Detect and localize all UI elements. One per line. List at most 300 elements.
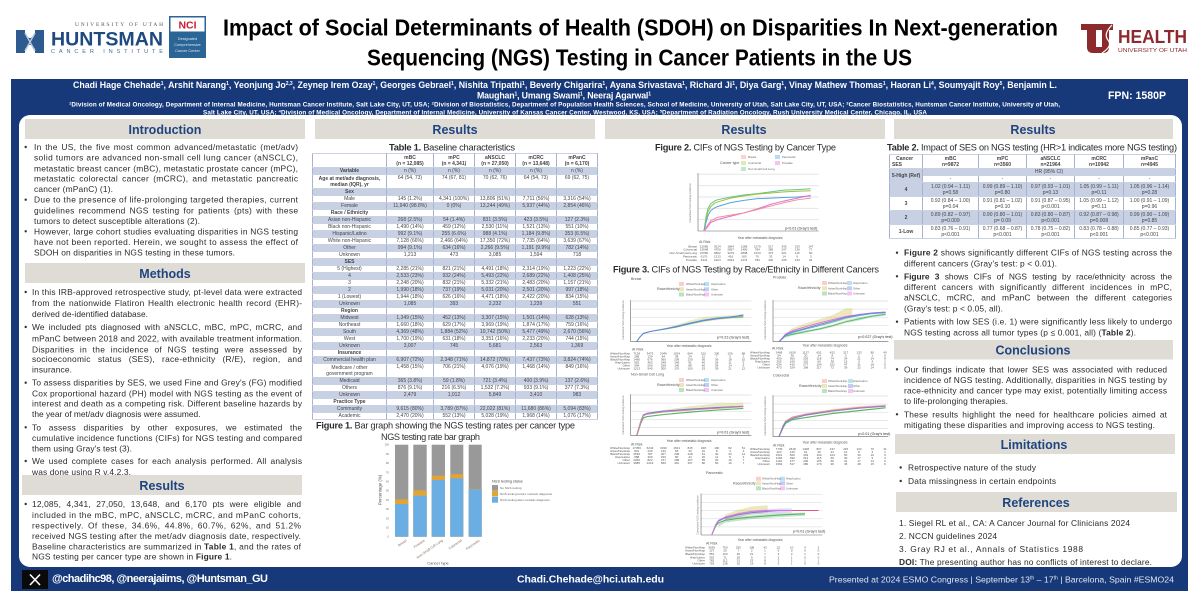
table 2: impact of SES on NGS testing: p=0.11: [1091, 190, 1107, 196]
chart: figure 2 CIF by cancer type: 77: [809, 248, 813, 252]
chart: figure 3 breast: 88: [742, 352, 745, 356]
chart: figure 3 breast: Breast: [631, 277, 641, 281]
table 1: baseline characteristics: 1,184 (9.8%): [522, 231, 550, 237]
chart: figure 3 non-small cell lung: Other: [622, 458, 630, 462]
panel: introduction: tumors to detect susceptible alterations (2).: [34, 216, 200, 226]
table 2: impact of SES on NGS testing: p<0.001: [1140, 232, 1159, 238]
table 1: baseline characteristics: 1,944 (18%): [396, 294, 424, 300]
chart: figure 2 CIF by cancer type: 147: [808, 244, 814, 248]
chart: figure 3 pancreatic: 26: [723, 549, 727, 553]
chart: figure 3 breast: 64: [662, 355, 665, 359]
chart: figure 3 prostate: 9: [858, 359, 860, 363]
table 2: impact of SES on NGS testing: mPC: [997, 156, 1008, 162]
chart: figure 2 CIF by cancer type: 1279: [754, 244, 761, 248]
panel: limitations: Retrospective nature of the study: [908, 462, 1037, 472]
table 1: baseline characteristics: 5,493 (22%): [481, 273, 509, 279]
table 1: baseline characteristics: 2,483 (20%): [522, 280, 550, 286]
chart: figure 3 non-small cell lung: Asian/NonHisp: [610, 449, 630, 453]
chart: figure 3 prostate: 118: [817, 356, 822, 360]
table 1: baseline characteristics: (n = 4,341): [442, 160, 466, 166]
heading: results column 3: Results: [721, 123, 767, 137]
table 1: baseline characteristics: 1,501 (14%): [522, 315, 550, 321]
table 1: baseline characteristics: 1,191 (9.9%): [522, 245, 550, 251]
chart: figure 3 pancreatic: 138: [722, 561, 728, 565]
table 2: impact of SES on NGS testing: n=4945: [1141, 162, 1158, 168]
chart: figure 3 colorectal: Cumulative NGS testing incidence: [763, 396, 767, 436]
table 2: impact of SES on NGS testing: 0.99 (0.89 – 1.10): [983, 184, 1022, 190]
panel: results summary: 12,085, 4,341, 27,050, 13,648, and 6,170 pts were eligible and: [32, 499, 301, 509]
table 1: baseline characteristics: 216 (6.5%): [442, 385, 466, 391]
table 1: baseline characteristics: 11,940 (98.8%): [393, 203, 427, 209]
table 1: baseline characteristics: 4,341 (100%): [439, 196, 469, 202]
table 1: baseline characteristics: 551: [573, 301, 581, 307]
chart: figure 3 prostate: 3: [845, 354, 847, 358]
table 1: baseline characteristics: 64 (54, 73): [524, 175, 548, 181]
chart: figure 3 breast: 170: [674, 367, 680, 371]
chart: figure 3 breast: 7: [716, 355, 718, 359]
chart: figure 3 prostate: 0: [884, 354, 886, 358]
text block: key results: (Gray's test: p < 0.05, all).: [904, 303, 1003, 313]
chart: figure 3 pancreatic: 3: [778, 552, 780, 556]
chart: figure 2 CIF by cancer type: 2857: [727, 248, 734, 252]
logo: NCI designated comprehensive cancer center: NCI: [178, 20, 197, 32]
table 2: impact of SES on NGS testing: mBC: [945, 156, 956, 162]
chart: figure 3 non-small cell lung: p=0.01 (Gray's test): [717, 430, 749, 434]
table 1: baseline characteristics: 4,369 (48%): [396, 329, 424, 335]
table 2: impact of SES on NGS testing: 0.97 (0.93 – 1.01): [1031, 184, 1070, 190]
chart: figure 3 breast: Race/ethnicity: [657, 287, 680, 291]
chart: figure 3 colorectal: 61: [804, 450, 808, 454]
chart: figure 2 CIF by cancer type: 345: [781, 244, 787, 248]
table 2: impact of SES on NGS testing: p<0.001: [1090, 232, 1108, 238]
chart: NGS testing rate bar graph: Breast: [397, 539, 408, 547]
table 1: baseline characteristics: 1,369: [571, 343, 583, 349]
table 1: baseline characteristics: 255 (6.6%): [442, 231, 466, 237]
panel: methods: interest and death as a competing risk. Different baseline hazards by: [32, 399, 303, 409]
chart: figure 3 pancreatic: 0: [778, 549, 780, 553]
chart: figure 3 pancreatic: Race/ethnicity: [733, 481, 756, 485]
chart: figure 3 prostate: 14: [871, 366, 874, 370]
chart: NGS testing rate bar graph: No NGS testing: [500, 486, 522, 490]
table 1: baseline characteristics: 551 (10%): [565, 224, 589, 230]
heading: results column 3: [605, 119, 885, 139]
panel: references: 1. Siegel RL et al., CA: A Cancer Journal for Clinicians 2024: [899, 518, 1130, 528]
chart: figure 3 pancreatic: 1: [804, 558, 806, 562]
chart: figure 3 non-small cell lung: Unknown: [617, 461, 630, 465]
table 1: baseline characteristics: 1,468 (14%): [522, 364, 550, 370]
chart: figure 3 non-small cell lung: 40: [715, 452, 719, 456]
table 1: baseline characteristics: 3,007: [404, 343, 416, 349]
chart: figure 2 CIF by cancer type: Breast: [748, 155, 757, 159]
chart: figure 2 CIF by cancer type: 14: [782, 255, 786, 259]
table 1: baseline characteristics: 3: [348, 280, 351, 286]
chart: figure 3 non-small cell lung: 988: [634, 455, 640, 459]
chart: figure 2 CIF by cancer type: 115: [795, 251, 800, 255]
chart: figure 2 CIF by cancer type: 130: [795, 258, 800, 262]
panel: references: 2. NCCN guidelines 2024: [899, 531, 997, 541]
chart: figure 3 non-small cell lung: 51: [742, 446, 745, 450]
table 2: impact of SES on NGS testing: 0.83 (0.80 – 0.87): [1031, 212, 1070, 218]
table 1: baseline characteristics: 10,742 (50%): [480, 329, 510, 335]
chart: figure 3 breast: 46: [702, 360, 705, 364]
table 2: impact of SES on NGS testing: 1-Low: [899, 228, 913, 234]
chart: figure 3 non-small cell lung: 80: [675, 455, 679, 459]
panel: methods: To assess disparities by SES, we used Fine and Grey's (FG) modified: [32, 378, 302, 388]
chart: figure 3 prostate: 21: [857, 356, 861, 360]
table 2: impact of SES on NGS testing: n=10942: [1089, 162, 1109, 168]
chart: figure 3 prostate: White/NonHisp: [828, 281, 848, 285]
chart: figure 3 pancreatic: 0: [804, 561, 806, 565]
chart: figure 3 non-small cell lung: 238: [674, 452, 680, 456]
table 2: impact of SES on NGS testing: p<0.001: [941, 232, 960, 238]
footer: presentation info: Presented at 2024 ESMO Congress | September 13th – 17th | Barcelona, Spain #ESMO24: [829, 574, 1174, 584]
chart: figure 3 breast: 24: [688, 355, 692, 359]
table 2: impact of SES on NGS testing: -: [1098, 176, 1100, 182]
table 1: baseline characteristics: 992 (9.1%): [398, 231, 422, 237]
chart: figure 2 CIF by cancer type: Colorectal: [683, 248, 697, 252]
panel: methods: To assess disparities by other exposures, we estimated the: [32, 422, 302, 432]
table 1: baseline characteristics: Variable: [340, 168, 359, 174]
chart: figure 3 prostate: 8: [831, 354, 833, 358]
table 1: baseline characteristics: 634 (16%): [442, 245, 466, 251]
table 1: baseline characteristics: 628 (13%): [565, 315, 589, 321]
logo: NCI designated comprehensive cancer center: [169, 16, 206, 58]
chart: figure 3 colorectal: 2618: [789, 447, 796, 451]
chart: figure 3 colorectal: 8: [858, 450, 860, 454]
author and affiliation banner: [69, 80, 1060, 116]
table 1: baseline characteristics: 365 (3.8%): [398, 378, 422, 384]
chart: figure 3 colorectal: 66: [831, 456, 834, 460]
chart: figure 3 pancreatic: 0: [804, 549, 806, 553]
chart: figure 3 pancreatic: 2: [818, 546, 820, 550]
chart: figure 3 pancreatic: 1: [791, 555, 793, 559]
chart: figure 3 prostate: At Risk: [772, 346, 784, 350]
chart: figure 3 colorectal: 60: [831, 459, 834, 463]
table 2: impact of SES on NGS testing: p=0.04: [943, 204, 958, 210]
chart: figure 3 non-small cell lung: 19: [728, 461, 732, 465]
table 1: baseline characteristics: 932 (24%): [442, 273, 466, 279]
chart: figure 3 prostate: 101: [803, 359, 809, 363]
chart: figure 3 prostate: 1626: [789, 351, 796, 355]
chart: figure 2 CIF by cancer type: 2808: [741, 251, 748, 255]
table 2: impact of SES on NGS testing: p= 0.09: [994, 218, 1011, 224]
table 1: baseline characteristics: Region: [341, 308, 358, 314]
table 1: baseline characteristics: 849 (16%): [565, 364, 589, 370]
panel: limitations: [895, 434, 1175, 486]
chart: figure 3 non-small cell lung: Black/NonHisp: [686, 388, 705, 392]
chart: figure 3 prostate: Unknown: [757, 366, 770, 370]
table 1: baseline characteristics: Black non-Hispanic: [328, 224, 371, 230]
chart: figure 3 pancreatic: 3639: [708, 546, 715, 550]
panel: results summary: NGS testing per cancer type are shown in Figure 1.: [32, 552, 232, 562]
chart: figure 3 non-small cell lung: 1219: [647, 461, 654, 465]
chart: figure 3 colorectal: 115: [817, 456, 822, 460]
panel: conclusions: Conclusions: [995, 344, 1071, 358]
chart: figure 2 CIF by cancer type: Prostate: [686, 258, 697, 262]
chart: figure 3 pancreatic: 1: [764, 549, 766, 553]
chart: figure 3 colorectal: 517: [790, 462, 795, 466]
table 1: baseline characteristics: 17,350 (72%): [480, 238, 510, 244]
chart: figure 3 pancreatic: 71: [723, 555, 727, 559]
heading: results column 2: [315, 119, 595, 139]
panel: conclusions: mitigating these disparities and improving access to NGS testing.: [904, 420, 1155, 430]
chart: figure 3 pancreatic: 3: [778, 558, 780, 562]
table 2: impact of SES on NGS testing: 0.78 (0.75 – 0.82): [1031, 226, 1070, 232]
chart: figure 2 CIF by cancer type: 784: [755, 248, 760, 252]
table 1: baseline characteristics: 997 (18%): [565, 287, 589, 293]
table 1: baseline characteristics: 4,471 (18%): [481, 294, 509, 300]
figure 3 caption: Figure 3. CIFs of NGS Testing by Race/Ethnicity in Different Cancers: [613, 264, 879, 274]
chart: figure 3 non-small cell lung: 44: [688, 455, 692, 459]
chart: figure 3 colorectal: 160: [816, 453, 822, 457]
chart: figure 3 prostate: Asian/NonHisp: [828, 286, 848, 290]
table 1: baseline characteristics: 393: [450, 301, 458, 307]
chart: figure 3 colorectal: 3: [871, 450, 873, 454]
table 1: baseline characteristics: 2,470 (20%): [396, 413, 424, 419]
logo: University of Utah Health: [1081, 24, 1187, 54]
table 1: baseline characteristics: 145 (1.2%): [398, 196, 422, 202]
chart: figure 3 non-small cell lung: 107: [687, 458, 693, 462]
chart: figure 3 prostate: 39: [844, 366, 848, 370]
chart: figure 3 pancreatic: Asian/NonHisp: [685, 549, 705, 553]
chart: figure 3 breast: Black/NonHisp: [686, 292, 705, 296]
chart: figure 3 non-small cell lung: Hisp/Latino: [615, 455, 630, 459]
table 1: baseline characteristics: 5,937 (44%): [522, 203, 550, 209]
table 1: baseline characteristics: 59 (1.8%): [443, 378, 465, 384]
text block: key results: NGS testing across all tumor types (p ≤ 0.001, all) (Table 2).: [904, 327, 1136, 337]
panel: methods: Methods: [139, 267, 191, 281]
table 2: impact of SES on NGS testing: mPanC: [1141, 156, 1158, 162]
chart: figure 3 non-small cell lung: 7: [743, 461, 745, 465]
chart: figure 3 non-small cell lung: 66: [675, 449, 679, 453]
chart: figure 3 pancreatic: 782: [709, 558, 715, 562]
chart: NGS testing rate bar graph: Prostate: [413, 538, 426, 549]
table 1: baseline characteristics: Sex: [345, 189, 354, 195]
table 1: baseline characteristics: 2,233 (20%): [522, 336, 550, 342]
chart: figure 3 breast: 38: [675, 355, 679, 359]
table 1: baseline characteristics: 1,085: [404, 301, 416, 307]
table 1: baseline characteristics: Asian non-Hispanic: [328, 217, 371, 223]
chart: figure 3 pancreatic: 0: [818, 549, 820, 553]
panel: results summary: received NGS testing after the met/adv diagnosis date, respectively.: [32, 531, 301, 541]
chart: figure 3 prostate: 22: [857, 366, 861, 370]
table 2: impact of SES on NGS testing: n=3560: [994, 162, 1011, 168]
table 2: impact of SES on NGS testing: 0.90 (0.80 – 1.01): [983, 212, 1022, 218]
table 1: baseline characteristics: 2,501 (20%): [522, 287, 550, 293]
table 1: baseline characteristics: 22,022 (81%): [480, 406, 510, 412]
chart: figure 3 breast: 2: [743, 355, 745, 359]
table 1: baseline characteristics: 5,477 (49%): [522, 329, 550, 335]
chart: figure 2 CIF by cancer type: 373: [768, 251, 774, 255]
chart: figure 3 non-small cell lung: 130: [661, 449, 666, 453]
table 2: impact of SES on NGS testing: p<0.001: [1041, 232, 1060, 238]
chart: figure 3 pancreatic: Other: [697, 558, 705, 562]
table 1: baseline characteristics: 9,615 (80%): [396, 406, 424, 412]
table 1: baseline characteristics: 2,530 (11%): [482, 224, 508, 230]
table 1: baseline characteristics: 5 (Highest): [337, 266, 362, 272]
table 1: baseline characteristics: 706 (21%): [442, 364, 466, 370]
chart: figure 3 pancreatic: 127: [709, 549, 715, 553]
table 1: baseline characteristics: 377 (7.3%): [565, 385, 589, 391]
chart: figure 3 breast: 91: [688, 360, 692, 364]
table 1: baseline characteristics: Academic: [339, 413, 360, 419]
chart: figure 3 colorectal: 215: [843, 447, 849, 451]
table 2: impact of SES on NGS testing: p=0.85: [1142, 218, 1157, 224]
chart: figure 3 pancreatic: 26: [737, 555, 740, 559]
chart: NGS testing rate bar graph: 10: [386, 526, 389, 530]
table 2: impact of SES on NGS testing: mCRC: [1091, 156, 1107, 162]
chart: figure 3 non-small cell lung: 4: [729, 449, 731, 453]
table 2: impact of SES on NGS testing: -: [1149, 176, 1150, 182]
chart: figure 2 CIF by cancer type: p<0.01 (Gray's test): [785, 226, 817, 230]
panel: methods: [24, 263, 305, 477]
chart: figure 3 pancreatic: Hisp/Latino: [690, 555, 705, 559]
chart: figure 3 pancreatic: 108: [749, 546, 755, 550]
panel: methods: socioeconomic status (SES), race-ethnicity (R/E), region, and: [32, 354, 302, 364]
chart: figure 2 CIF by cancer type: 233: [795, 244, 800, 248]
table 1: baseline characteristics: mCRC: [528, 154, 544, 160]
table 2: impact of SES on NGS testing: 3: [905, 200, 907, 206]
table 1: baseline characteristics: 737 (19%): [442, 287, 466, 293]
chart: figure 2 CIF by cancer type: [669, 155, 819, 262]
chart: figure 3 colorectal: 12: [844, 450, 848, 454]
chart: figure 3 prostate: 14: [817, 354, 821, 358]
table 1: baseline characteristics: 1,700 (19%): [396, 336, 424, 342]
chart: figure 3 breast: 12: [742, 367, 745, 371]
table 1: baseline characteristics: 2,248 (20%): [396, 280, 424, 286]
table 1: baseline characteristics: 3,085: [489, 252, 501, 258]
chart: figure 3 pancreatic: Year after metastatic diagnosis: [738, 538, 783, 542]
chart: NGS testing rate bar graph: 50: [386, 489, 389, 493]
panel: methods: In this IRB-approved retrospective study, pt-level data were extracted: [32, 287, 302, 297]
table 2: impact of SES on NGS testing: 0.91 (0.87 – 0.95): [1031, 198, 1070, 204]
chart: figure 3 non-small cell lung: 845: [687, 446, 693, 450]
table 1: baseline characteristics: Community: [337, 406, 362, 412]
table 2: impact of SES on NGS testing: 5-High (Ref): [892, 172, 920, 178]
table 1: baseline characteristics: 1,408 (25%): [563, 273, 591, 279]
chart: NGS testing rate bar graph: Colorectal: [448, 538, 463, 551]
chart: figure 3 pancreatic: 19: [750, 561, 754, 565]
table 1: baseline characteristics: mPanC: [568, 154, 586, 160]
chart: figure 3 non-small cell lung: 300: [647, 455, 653, 459]
panel: references: 3. Gray RJ et al., Annals of Statistics 1988: [899, 544, 1083, 554]
table 1: baseline characteristics: mPC: [448, 154, 460, 160]
chart: figure 3 prostate: 117: [817, 366, 822, 370]
table 2: impact of SES on NGS testing: 1.00 (0.91 – 1.09): [1130, 198, 1169, 204]
chart: figure 2 CIF by cancer type: 4700: [714, 248, 721, 252]
chart: figure 3 non-small cell lung: 30: [715, 458, 719, 462]
table 2: impact of SES on NGS testing: p=0.11: [1091, 204, 1107, 210]
text block: key results: Figure 3 shows CIFs of NGS testing by race/ethnicity across the: [904, 271, 1172, 281]
table 1: baseline characteristics: 1,990 (18%): [396, 287, 424, 293]
chart: figure 3 colorectal: White/NonHisp: [828, 379, 848, 383]
chart: figure 3 prostate: 4: [871, 359, 873, 363]
table 2: impact of SES on NGS testing: p=0.80: [995, 190, 1010, 196]
chart: figure 3 pancreatic: 250: [736, 546, 741, 550]
panel: conclusions: to life-prolonging therapies.: [904, 396, 1008, 406]
chart: figure 3 breast: 3473: [647, 352, 654, 356]
chart: figure 3 pancreatic: 22: [777, 546, 780, 550]
chart: figure 3 non-small cell lung: 407: [661, 452, 666, 456]
chart: figure 3 non-small cell lung: Race/ethnicity: [657, 383, 680, 387]
chart: figure 3 pancreatic: 718: [709, 561, 715, 565]
author and affiliation banner: Maughan1, Umang Swami1, Neeraj Agarwal1: [477, 90, 651, 100]
heading: results column 4: Results: [1010, 123, 1056, 137]
chart: figure 3 non-small cell lung: 190: [714, 446, 720, 450]
chart: NGS testing rate bar graph: 90: [386, 452, 389, 456]
panel: methods: We included pts diagnosed with aNSCLC, mBC, mPC, mCRC, and: [32, 322, 302, 332]
chart: figure 3 breast: 10: [742, 357, 745, 361]
table 1: baseline characteristics: 1,239: [530, 301, 542, 307]
chart: figure 2 CIF by cancer type: Pancreatic: [683, 255, 697, 259]
table 1: baseline characteristics: 127 (2.3%): [565, 217, 589, 223]
table 2: impact of SES on NGS testing: SES: [892, 162, 902, 168]
chart: figure 3 breast: 300: [661, 367, 666, 371]
chart: figure 3 pancreatic: 1: [818, 558, 820, 562]
panel: introduction: have not been reported. Herein, we sought to assess the effect of: [34, 237, 299, 247]
table 1: baseline characteristics: 137 (2.6%): [565, 378, 589, 384]
chart: figure 3 non-small cell lung: White/NonHisp: [610, 446, 630, 450]
chart: figure 3 colorectal: 45: [844, 462, 848, 466]
table 1: baseline characteristics: 4: [348, 273, 351, 279]
chart: figure 3 breast: Other: [711, 287, 718, 291]
table 1: baseline characteristics: n (%): [571, 168, 583, 174]
table 1: baseline characteristics: 631 (18%): [442, 336, 466, 342]
chart: figure 3 non-small cell lung: 55: [702, 458, 705, 462]
chart: NGS testing rate bar graph: 30: [386, 507, 389, 511]
chart: figure 3 prostate: 15: [844, 359, 848, 363]
chart: figure 3 prostate: Black/NonHisp: [750, 356, 770, 360]
table 1: baseline characteristics: 268 (2.5%): [398, 217, 422, 223]
chart: figure 2 CIF by cancer type: 517: [768, 244, 774, 248]
chart: figure 3 colorectal: 30: [844, 456, 848, 460]
chart: figure 3 pancreatic: White/NonHisp: [762, 477, 782, 481]
chart: figure 3 colorectal: 40: [817, 450, 821, 454]
table 2 title: Table 2. Impact of SES on NGS testing (HR>1 indicates more NGS testing): [887, 142, 1177, 152]
chart: figure 3 colorectal: 9: [884, 453, 886, 457]
table 1: baseline characteristics: 11,680 (86%): [521, 406, 551, 412]
logo: NCI designated comprehensive cancer center: Comprehensive: [174, 43, 201, 47]
table 2: impact of SES on NGS testing: p=0.009: [941, 218, 960, 224]
chart: figure 3 colorectal: 1191: [776, 459, 783, 463]
chart: figure 3 non-small cell lung: White/NonHisp: [686, 378, 706, 382]
chart: figure 3 breast: 258: [661, 364, 666, 368]
chart: figure 3 non-small cell lung: 822: [647, 458, 653, 462]
panel: introduction: SDOH on disparities in NGS testing in these tumors.: [34, 248, 235, 258]
table 1: baseline characteristics: 7,437 (73%): [522, 357, 550, 363]
chart: figure 3 prostate: p=0.027 (Gray's test): [858, 335, 892, 339]
table 1: baseline characteristics: median (IQR), yr: [330, 182, 369, 188]
chart: figure 2 CIF by cancer type: Non-Small Cell Lung: [669, 251, 697, 255]
table 1: baseline characteristics: (n = 27,050): [481, 160, 509, 166]
chart: figure 3 pancreatic: 51: [737, 558, 740, 562]
chart: figure 3 prostate: 203: [803, 356, 809, 360]
chart: figure 3 colorectal: [750, 373, 890, 466]
chart: figure 3 non-small cell lung: [610, 372, 751, 465]
chart: figure 3 breast: Other: [622, 364, 630, 368]
chart: figure 3 breast: Unknown: [711, 292, 723, 296]
chart: figure 3 breast: 2049: [660, 352, 667, 356]
chart: figure 3 prostate: 300: [790, 356, 795, 360]
table 1: baseline characteristics: n (%): [530, 168, 542, 174]
chart: figure 3 prostate: 133: [856, 351, 862, 355]
table 1: baseline characteristics: Age at met/adv diagnosis,: [319, 176, 380, 182]
chart: figure 3 non-small cell lung: 50: [715, 461, 719, 465]
chart: figure 3 pancreatic: p=0.01 (Gray's test): [793, 530, 825, 534]
chart: figure 3 breast: 28: [715, 364, 719, 368]
chart: figure 3 colorectal: 104: [830, 453, 835, 457]
chart: NGS testing rate bar graph: Cancer type: [427, 560, 450, 566]
